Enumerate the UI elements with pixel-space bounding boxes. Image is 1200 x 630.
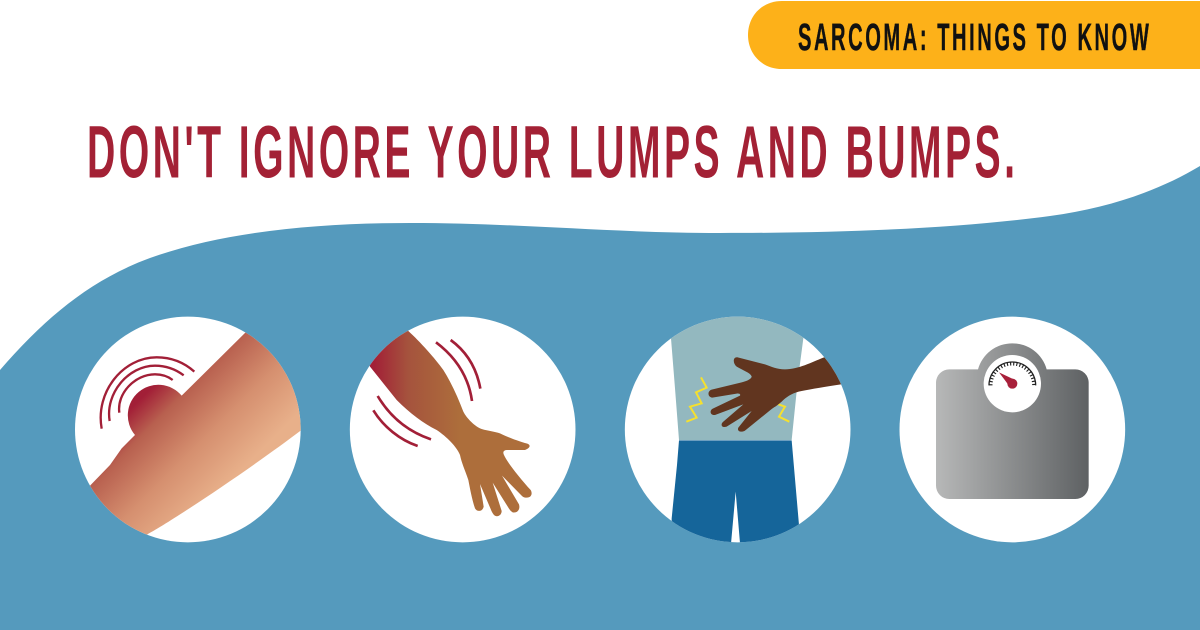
title: DON'T IGNORE YOUR LUMPS AND BUMPS. — [87, 110, 1015, 194]
icon: bathroom scale — [899, 317, 1125, 542]
motion arcs — [373, 340, 480, 446]
pulse arcs — [101, 357, 194, 429]
scale body — [936, 343, 1089, 499]
dial ticks — [989, 362, 1036, 385]
torso and shorts — [671, 316, 842, 542]
banner: sarcoma things to know — [748, 1, 1200, 69]
icon: arm with swelling — [350, 317, 575, 542]
dial face — [984, 355, 1041, 412]
banner text: SARCOMA: THINGS TO KNOW — [798, 16, 1149, 59]
hand — [708, 357, 842, 432]
icon: arm with lump — [75, 316, 301, 542]
icon: hand on painful abdomen — [624, 316, 850, 542]
arm with lump shape — [90, 332, 301, 535]
blue wave background — [0, 166, 1200, 630]
dial needle — [999, 372, 1017, 389]
pain zigzag marks — [686, 377, 789, 422]
arm and hand — [370, 330, 532, 516]
